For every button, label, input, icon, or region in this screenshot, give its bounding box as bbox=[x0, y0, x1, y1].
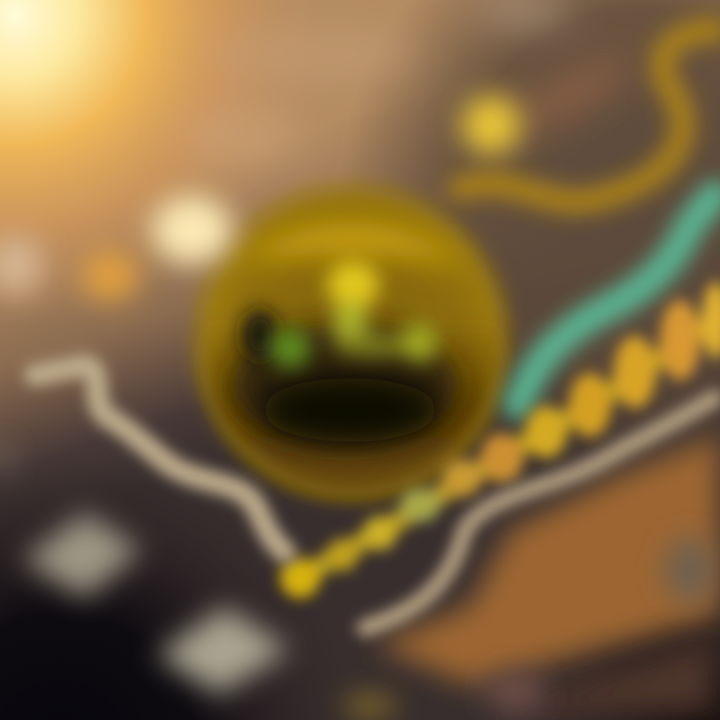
patch: lower left bbox=[22, 512, 142, 598]
dot: yellow bbox=[461, 95, 521, 155]
top texture patches bbox=[180, 0, 637, 163]
glow dots bbox=[0, 95, 521, 716]
sphere lower shade bbox=[202, 331, 500, 498]
gold sphere bbox=[197, 187, 507, 497]
dot: cream bbox=[152, 196, 232, 264]
cream curve: lower right bbox=[365, 398, 715, 628]
bottom right band: orange brown bbox=[375, 435, 720, 712]
patch: far left bbox=[0, 444, 10, 472]
patch: lower right bbox=[665, 538, 715, 602]
patch: bottom centre bbox=[156, 606, 290, 694]
dot: dim yellow bottom bbox=[344, 696, 396, 716]
sphere interior: dark left spot bbox=[242, 309, 278, 361]
sphere highlight: upper rim bbox=[245, 222, 465, 270]
zigzag yellow line bbox=[280, 282, 720, 598]
cream squiggle: left bbox=[35, 365, 285, 552]
gold curve: upper right bbox=[460, 30, 715, 201]
dot: pale left bbox=[0, 235, 43, 295]
sunlight glow: top left bbox=[0, 0, 274, 292]
dot: orange bbox=[82, 252, 138, 300]
patch: bottom bbox=[485, 672, 545, 712]
sphere interior: green highlights bbox=[270, 261, 438, 368]
sphere interior: dark mound bbox=[262, 378, 438, 442]
pale diamond patches bbox=[0, 444, 715, 712]
teal line bbox=[518, 195, 715, 405]
sphere interior: dark mass bbox=[233, 325, 457, 445]
